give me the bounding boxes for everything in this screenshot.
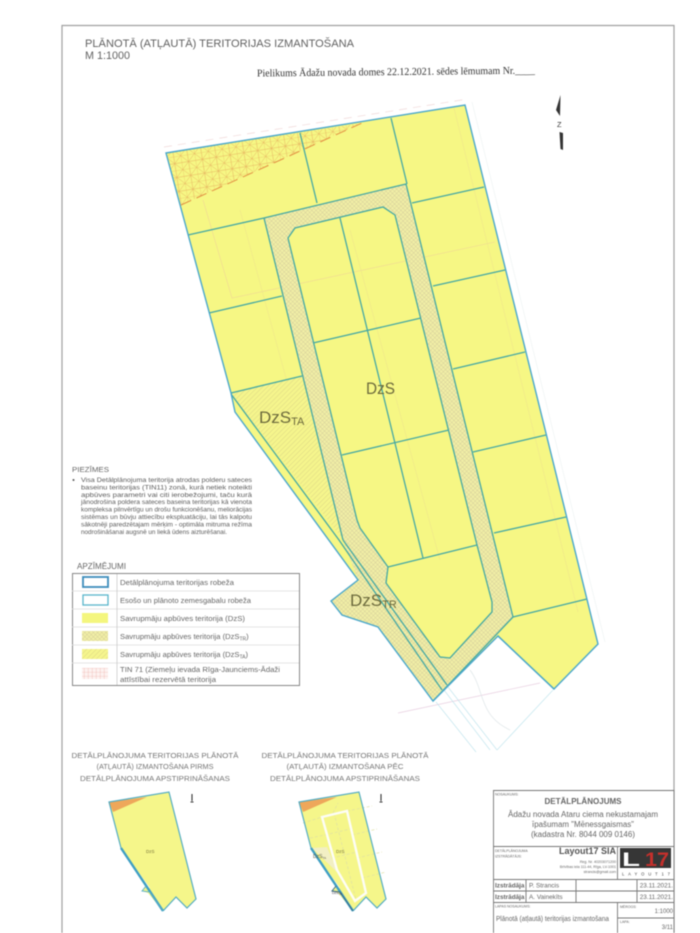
notes text: apbūves parametri vai citi ierobežojumi, taču kurā: [81, 492, 253, 499]
label DzS TA: TA: [291, 416, 305, 428]
title block frame: [494, 790, 674, 933]
legend labels: ): [245, 650, 248, 659]
legend labels: Savrupmāju apbūves teritorija (DzS): [120, 614, 245, 623]
author rows: Izstrādāja: [495, 882, 525, 890]
legend labels: TA: [239, 654, 246, 660]
legend labels: Detālplānojuma teritorijas robeža: [120, 578, 235, 587]
title block: [494, 790, 674, 933]
annex note: Pielikums Ādažu novada domes 22.12.2021. sēdes lēmumam Nr.____: [257, 66, 536, 79]
author rows: 23.11.2021.: [640, 894, 673, 901]
notes text: nodrošināšanai augsnē un liekā ūdens aizturēšanai.: [81, 529, 227, 536]
project title: (kadastra Nr. 8044 009 0146): [531, 830, 635, 839]
small map: before approval: [109, 792, 196, 911]
small map heading: before approval: [72, 751, 239, 783]
author rows: 23.11.2021.: [640, 882, 673, 890]
title: [85, 37, 355, 62]
small map: after approval: DzS: [332, 891, 339, 895]
notes block: [72, 465, 253, 536]
developer details: strancis@gmail.com: [584, 870, 616, 874]
logo: Layout17: 17: [645, 850, 669, 871]
small map heading: before approval: DETĀLPLĀNOJUMA TERITORIJAS PLĀNOTĀ: [72, 751, 239, 760]
title: M 1:1000: [85, 50, 130, 62]
logo: Layout17: LAYOUT17: [622, 872, 671, 876]
swatch: DzS TR: [82, 631, 108, 641]
legend labels: TIN 71 (Ziemeļu ievada Rīga-Jaunciems-Ādaži: [120, 665, 280, 674]
developer details: Layout17 SIA: [559, 846, 616, 856]
notes text: [72, 477, 253, 536]
small map: after approval: TR: [339, 893, 342, 896]
small map heading: after approval: DETĀLPLĀNOJUMA TERITORIJAS PLĀNOTĀ: [262, 751, 429, 760]
small map: before approval: DzS: [146, 849, 155, 854]
icon: north arrow: Z: [557, 120, 562, 129]
road territory DzS TR: [264, 184, 513, 701]
sheet name and scale: [495, 904, 674, 931]
icon: north arrow: [556, 95, 563, 150]
parcel boundaries: [188, 118, 587, 701]
legend labels: ): [246, 632, 249, 641]
project title: Ādažu novada Ataru ciema nekustamajam: [508, 810, 658, 819]
project title: [495, 792, 658, 839]
small map: after approval: DzS: [313, 854, 322, 860]
legend heading: APZĪMĒJUMI: [77, 561, 126, 571]
logo: Layout17: [620, 848, 671, 876]
yellow land area DzS: [166, 105, 598, 701]
legend labels: Savrupmāju apbūves teritorija (DzS: [120, 632, 239, 641]
legend labels: attīstībai rezervētā teritorija: [120, 675, 217, 684]
label DzS TA: DzS: [259, 408, 291, 427]
notes heading: PIEZĪMES: [72, 465, 109, 474]
author rows: A. Vainekīts: [529, 894, 563, 901]
swatch: TIN 71: [82, 668, 108, 679]
project title: DETĀLPLĀNOJUMS: [544, 796, 622, 806]
small map: after approval: [299, 792, 386, 911]
swatch: plan boundary: [83, 577, 108, 587]
sheet name and scale: LAPA:: [620, 920, 630, 924]
legend: [72, 561, 300, 686]
legend table: [72, 574, 300, 686]
faint interior lines: [203, 108, 578, 612]
territory DzS TA: [231, 376, 343, 540]
site boundary: [166, 105, 598, 701]
sheet name and scale: Plānotā (atļautā) teritorijas izmantošana: [496, 916, 609, 923]
author rows: Izstrādāja: [495, 894, 525, 901]
logo: Layout17: L: [622, 850, 641, 871]
TIN 71 crosshatched area: [166, 123, 362, 205]
small map heading: after approval: [262, 751, 429, 783]
sheet name and scale: 1:1000: [655, 909, 674, 915]
notes text: kompleksa pilnvērtīgu un drošu funkcionēšanu, meliorācijas: [81, 506, 252, 514]
notes text: sistēmas un būvju attiecību ekspluatāciju, lai tās kalpotu: [81, 514, 252, 521]
sheet name and scale: LAPAS NOSAUKUMS:: [495, 904, 531, 908]
legend labels: Esošo un plānoto zemesgabalu robeža: [120, 596, 252, 605]
legend labels: [120, 578, 280, 684]
project title: NOSAUKUMS:: [495, 792, 519, 796]
title: PLĀNOTĀ (ATĻAUTĀ) TERITORIJAS IZMANTOŠANA: [85, 37, 355, 50]
sheet name and scale: MĒROGS:: [620, 905, 637, 909]
developer details: Reg. Nr. 40203071200: [580, 860, 616, 864]
small map: after approval: TA: [322, 856, 326, 860]
developer details: DETĀLPLĀNOJUMA: [495, 849, 528, 853]
notes text: Visa Detālplānojuma teritorija atrodas polderu sateces: [81, 477, 252, 484]
notes text: baseinu teritorijas (TIN11) zonā, kurā netiek noteikti: [81, 484, 252, 492]
notes text: sākotnēji paredzētajam mērķim - optimāla mitruma režīma: [81, 522, 252, 528]
small map heading: after approval: DETĀLPLĀNOJUMA APSTIPRINĀŠANAS: [270, 774, 420, 783]
small map heading: before approval: DETĀLPLĀNOJUMA APSTIPRINĀŠANAS: [80, 774, 230, 783]
small map: after approval: DzS: [336, 849, 345, 854]
swatch: parcel boundary: [83, 595, 108, 605]
legend labels: Savrupmāju apbūves teritorija (DzS: [120, 650, 239, 659]
label DzS TR: DzS: [350, 591, 382, 610]
developer details: Brīvības iela 111-44, Rīga, LV-1001: [560, 865, 616, 869]
legend labels: TR: [239, 636, 247, 642]
project title: īpašumam "Mēnessgaismas": [532, 820, 634, 829]
developer details: [495, 846, 616, 874]
faint surrounding survey lines: [164, 99, 605, 752]
swatch: DzS TA: [82, 649, 108, 659]
author rows: P. Strancis: [529, 882, 559, 890]
site plan map: [164, 99, 605, 752]
developer details: IZSTRĀDĀTĀJS:: [495, 854, 522, 858]
small map heading: after approval: (ATĻAUTĀ) IZMANTOŠANA PĒC: [286, 762, 404, 771]
swatch: DzS: [82, 613, 108, 623]
sheet name and scale: 3/11: [662, 925, 674, 931]
small map heading: before approval: (ATĻAUTĀ) IZMANTOŠANA PIRMS: [96, 762, 214, 771]
label DzS TR: TR: [382, 599, 397, 611]
author rows: [495, 882, 673, 901]
notes text: jānodrošina poldera sateces baseina teritorijas kā vienota: [80, 499, 252, 506]
label DzS: DzS: [366, 379, 395, 398]
